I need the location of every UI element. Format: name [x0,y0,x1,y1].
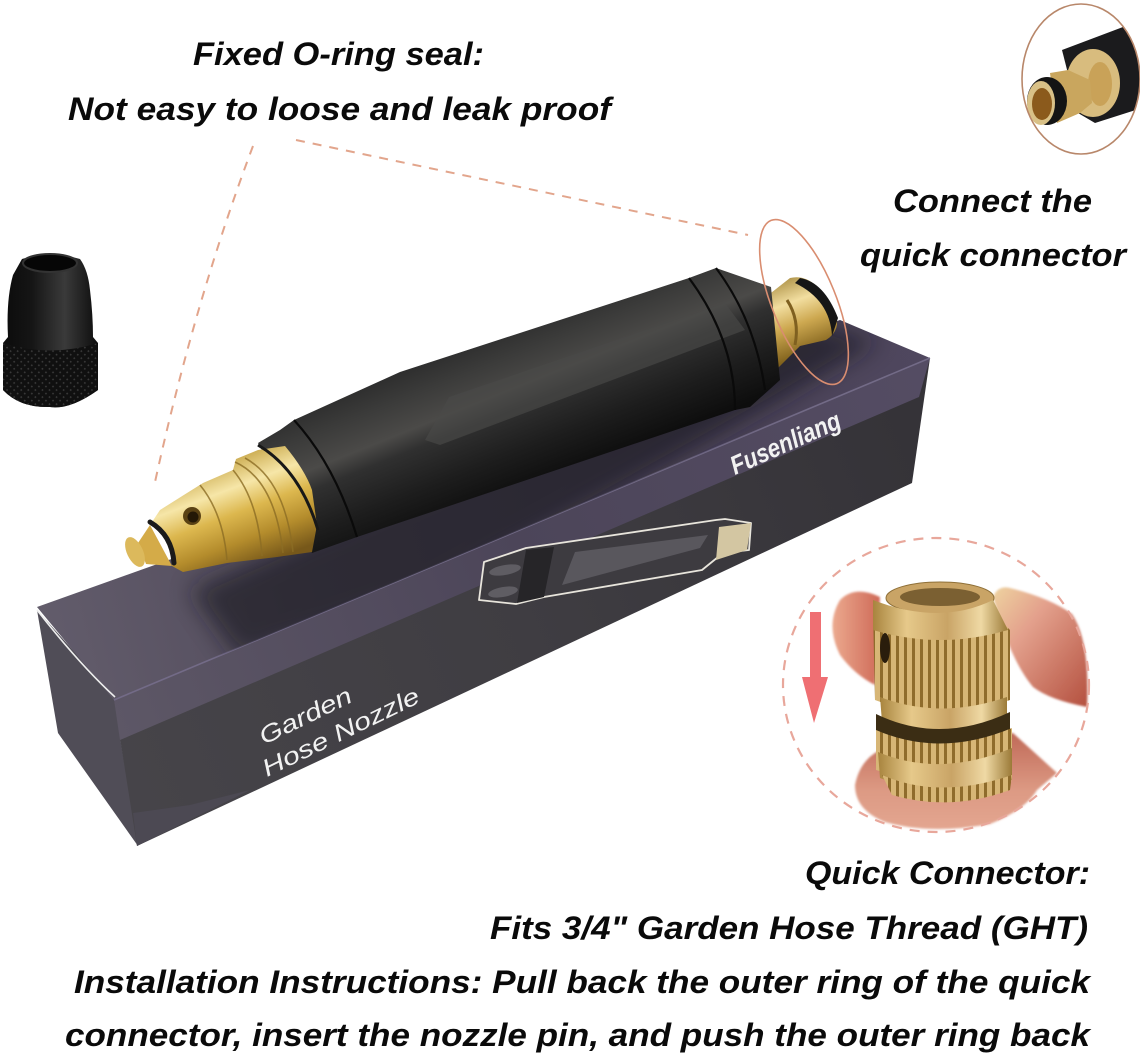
body grooves [294,268,765,537]
caption: quick connector instructions: Quick Connector: [805,855,1090,891]
box purple bevel band [114,358,930,740]
caption: fixed O-ring seal: Not easy to loose and leak proof [68,91,615,127]
caption: quick connector instructions [65,855,1092,1053]
icon: black nozzle cap [3,254,98,407]
caption: fixed O-ring seal [68,36,615,127]
box lower flap [133,790,250,846]
caption: connect the quick connector: quick connector [860,237,1128,273]
black body [258,268,780,553]
brass front section [121,445,318,572]
caption: quick connector instructions: Installation Instructions: Pull back the outer ring of the quick [74,964,1092,1000]
shadow under nozzle [190,320,880,660]
arrow: pull direction [802,612,828,723]
connector body [873,582,1012,802]
box top face [37,320,930,700]
box product text: Hose Nozzle [258,683,424,782]
inset: quick connector close-up [1022,4,1140,154]
caption: fixed O-ring seal: Fixed O-ring seal: [193,36,484,72]
box end face [37,610,138,846]
orange highlight ellipse [741,208,867,396]
box brand text: Fusenliang [725,405,845,480]
box product text [255,682,424,782]
caption: quick connector instructions: connector, insert the nozzle pin, and push the outer ring back [65,1017,1092,1053]
hand [832,587,1087,829]
dashed circle [783,538,1089,832]
inset: hand holding brass connector [783,538,1089,832]
caption: quick connector instructions: Fits 3/4" Garden Hose Thread (GHT) [490,910,1088,946]
rear brass connector [762,277,838,368]
caption: connect the quick connector [860,183,1128,273]
box front face [114,358,930,846]
dashed leader lines [155,140,748,482]
box nozzle illustration [479,519,751,604]
box product text: Garden [255,682,357,750]
body facet highlight [425,303,745,445]
caption: connect the quick connector: Connect the [893,183,1092,219]
product box [37,320,930,846]
nozzle [121,268,838,572]
